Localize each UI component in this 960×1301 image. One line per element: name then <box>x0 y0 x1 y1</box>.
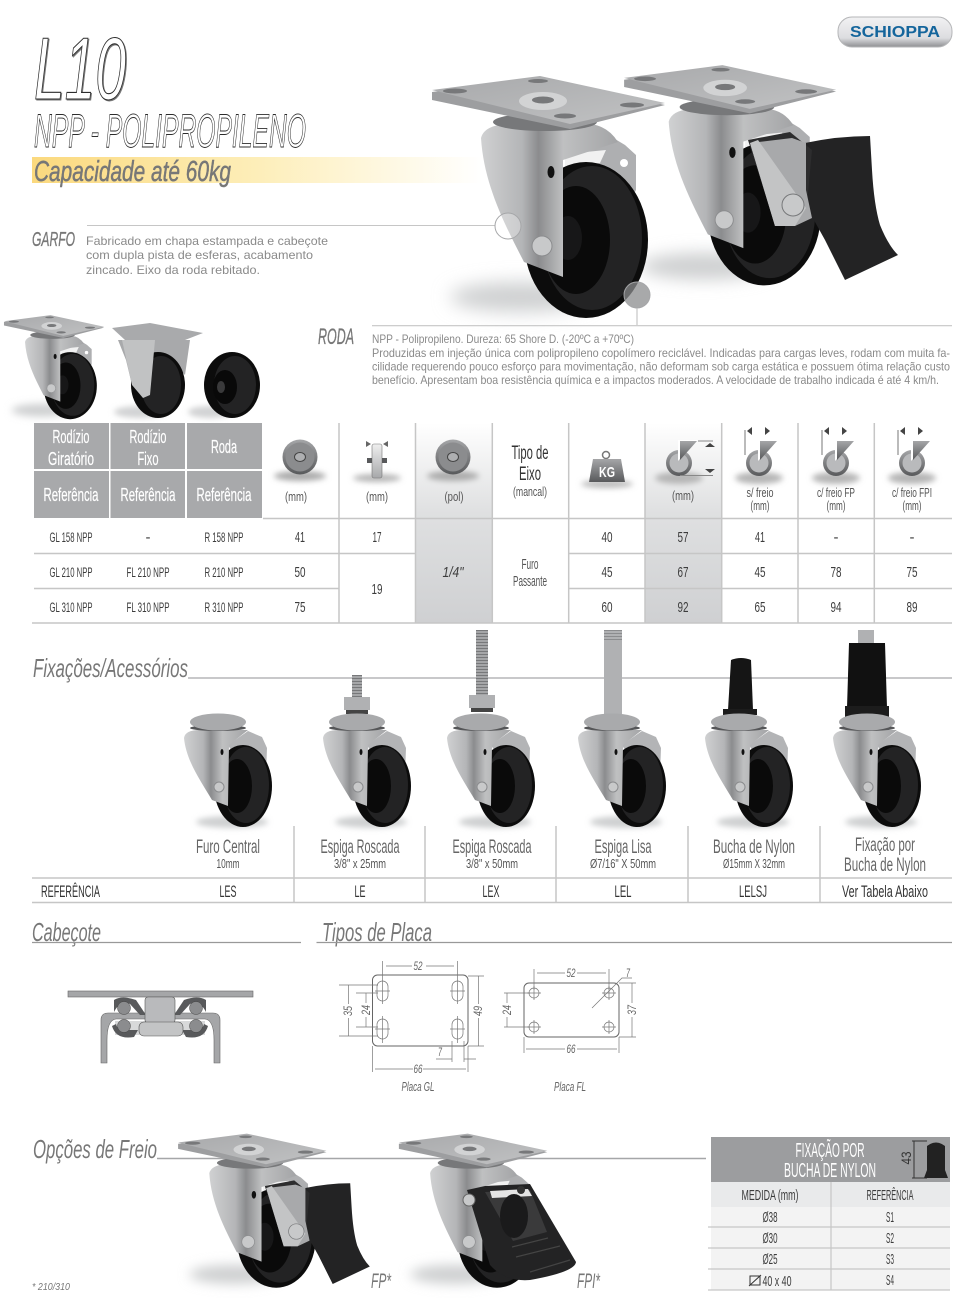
wheel section line <box>372 325 952 327</box>
FPI label: FPI* <box>577 1270 600 1293</box>
accessory: nylon bushing fixing caster <box>833 630 921 828</box>
nylon bushing table: BUCHA DE NYLON <box>784 1160 876 1182</box>
plate FL label: Placa FL <box>554 1079 586 1094</box>
logo: Schioppa <box>838 17 952 47</box>
accessories table: Espiga Roscada <box>320 837 400 858</box>
specification table: 17 <box>372 529 382 546</box>
nylon bushing table: Ø30 <box>762 1230 778 1247</box>
specification table: 41 <box>755 529 765 546</box>
specification table: FL 210 NPP <box>126 565 170 580</box>
specification table: Referência <box>196 485 252 505</box>
plate GL drawing <box>339 959 485 1076</box>
accessories table: Furo Central <box>196 837 260 858</box>
accessory: smooth stem caster <box>578 630 666 828</box>
detail callouts <box>495 213 650 325</box>
accessories table: LEX <box>482 882 500 901</box>
specification table: 89 <box>906 599 918 616</box>
fork description: Fabricado em chapa estampada e cabeçote <box>86 234 328 248</box>
specification table: R 210 NPP <box>204 565 244 580</box>
plate GL label: Placa GL <box>402 1079 434 1094</box>
accessories table: 3/8" x 50mm <box>466 856 518 871</box>
specification table: - <box>910 529 914 546</box>
product photo: FPI brake <box>399 1134 576 1288</box>
specification table: 75 <box>906 564 918 581</box>
specification table: Referência <box>120 485 176 505</box>
specification table: 75 <box>294 599 306 616</box>
specification table: FL 310 NPP <box>126 600 170 615</box>
accessories table: Ø15mm X 32mm <box>723 856 785 871</box>
specification table: - <box>834 529 838 546</box>
product photo: caster with brake <box>624 65 898 285</box>
brake options divider <box>157 1158 706 1160</box>
nylon bushing table: Ø38 <box>762 1209 778 1226</box>
accessories table: Fixação por <box>855 835 915 856</box>
specification table: (mancal) <box>513 484 547 499</box>
specification table: c/ freio FPI <box>892 485 932 500</box>
specification table: (mm) <box>285 489 307 504</box>
icon: total height <box>655 440 715 484</box>
specification table: GL 310 NPP <box>50 600 92 615</box>
specification table: 19 <box>372 581 382 598</box>
specification table: (mm) <box>672 488 694 503</box>
icon: offset without brake <box>735 427 783 484</box>
heading: Cabeçote: Cabeçote <box>32 917 101 947</box>
small product photo: swivel caster <box>4 315 104 419</box>
specification table: Fixo <box>138 449 158 469</box>
subtitle NPP - Polipropileno: NPP - POLIPROPILENO <box>34 104 306 157</box>
small product photo: fixed caster <box>112 323 203 418</box>
specification table: Referência <box>44 485 99 505</box>
icon: load weight: KG <box>599 464 615 481</box>
accessories divider <box>188 677 952 679</box>
plate FL drawing: 66 <box>566 1042 576 1056</box>
accessories table: LEL <box>614 882 632 901</box>
specification table: Furo <box>522 556 538 573</box>
specification table: 78 <box>830 564 842 581</box>
specification table: 1/4" <box>442 564 464 581</box>
nylon bushing table: 40 x 40 <box>762 1273 792 1290</box>
accessories table <box>32 826 952 902</box>
small product photo: wheel <box>188 352 260 418</box>
specification table: Rodízio <box>130 427 166 447</box>
specification table: 57 <box>678 529 688 546</box>
fork description: zincado. Eixo da roda rebitado. <box>86 263 260 277</box>
specification table: 50 <box>294 564 306 581</box>
plate GL drawing: 66 <box>414 1062 423 1076</box>
cabeçote cross-section diagram <box>68 991 253 1063</box>
nylon bushing table: S4 <box>886 1272 894 1289</box>
capacity text: Capacidade até 60kg <box>34 156 231 188</box>
fork divider line <box>87 224 495 226</box>
specification table: (mm) <box>366 489 388 504</box>
specification table: Tipo de <box>512 443 548 464</box>
accessory: central hole caster <box>184 714 272 828</box>
plate GL drawing: 24 <box>359 1005 373 1016</box>
nylon bushing table: FIXAÇÃO POR <box>796 1138 864 1162</box>
accessories heading: Fixações/Acessórios <box>33 653 188 683</box>
specification table: R 158 NPP <box>204 530 244 545</box>
fork description <box>86 234 328 277</box>
accessories table: LELSJ <box>739 882 767 901</box>
specification table: (mm) <box>750 498 770 513</box>
accessory: threaded stem 25mm caster <box>323 675 411 828</box>
fork description: com dupla pista de esferas, acabamento <box>86 248 313 262</box>
heading: Tipos de Placa: Tipos de Placa <box>322 917 432 947</box>
specification table: 60 <box>602 599 612 616</box>
accessories table: 10mm <box>216 856 240 871</box>
specification table: 41 <box>295 529 305 546</box>
capacity band <box>32 157 482 183</box>
nylon bushing table <box>708 1137 950 1290</box>
specification table: (pol) <box>444 489 464 504</box>
plate FL drawing: 52 <box>566 966 576 980</box>
specification table: 94 <box>830 599 842 616</box>
specification table: Eixo <box>519 464 541 485</box>
plate FL drawing: 24 <box>500 1005 514 1016</box>
nylon bushing table: MEDIDA (mm) <box>742 1187 798 1204</box>
title L10: L10 <box>34 19 126 118</box>
brake options heading: Opções de Freio <box>33 1134 157 1164</box>
nylon bushing table: S3 <box>886 1251 894 1268</box>
accessories table: LES <box>220 882 236 901</box>
icon: wheel width <box>353 441 401 482</box>
product photo: swivel caster <box>432 76 665 318</box>
specification table: 40 <box>602 529 612 546</box>
footnote: * 210/310 <box>32 1282 70 1293</box>
logo: Schioppa: SCHIOPPA <box>850 24 940 41</box>
wheel heading: RODA <box>318 324 354 349</box>
fork heading: GARFO <box>32 229 75 251</box>
plate GL drawing: 52 <box>414 959 423 973</box>
specification table: 67 <box>678 564 688 581</box>
nylon bushing table: 43 <box>898 1151 914 1164</box>
plate GL drawing: 49 <box>471 1006 485 1016</box>
specification table: R 310 NPP <box>204 600 244 615</box>
product photo: FP brake <box>178 1134 370 1288</box>
icon: wheel diameter <box>274 440 326 481</box>
icon: axle bore <box>427 440 479 481</box>
FP label: FP* <box>371 1270 391 1293</box>
accessories table: LE <box>354 882 366 901</box>
plate FL drawing: 37 <box>625 1004 639 1015</box>
specification table: Passante <box>513 573 547 590</box>
specification table: 45 <box>602 564 612 581</box>
specification table: Roda <box>211 437 238 457</box>
specification table: 92 <box>678 599 688 616</box>
specification table: (mm) <box>902 498 922 513</box>
specification table <box>32 423 952 623</box>
accessories table: Bucha de Nylon <box>713 837 795 858</box>
accessories table: Ø7/16" X 50mm <box>590 856 656 871</box>
specification table: GL 210 NPP <box>50 565 92 580</box>
specification table: GL 158 NPP <box>50 530 92 545</box>
nylon bushing table: S2 <box>886 1230 894 1247</box>
specification table: 65 <box>754 599 766 616</box>
plate FL drawing <box>500 966 639 1056</box>
specification table: Rodízio <box>52 427 90 447</box>
specification table: (mm) <box>826 498 846 513</box>
accessories table: Espiga Roscada <box>452 837 532 858</box>
accessory: threaded stem 50mm caster <box>447 630 535 828</box>
plate GL drawing: 35 <box>341 1006 355 1016</box>
nylon bushing table: Ø25 <box>762 1251 778 1268</box>
accessory: nylon bushing caster <box>705 658 793 828</box>
specification table: Giratório <box>48 449 94 469</box>
icon: offset with FP brake <box>812 427 860 484</box>
plate GL drawing: 7 <box>438 1045 443 1059</box>
accessories table: 3/8" x 25mm <box>334 856 386 871</box>
specification table: 45 <box>754 564 766 581</box>
plate FL drawing: 7 <box>626 966 631 980</box>
wheel description <box>372 332 950 387</box>
nylon bushing table: S1 <box>886 1209 894 1226</box>
specification table: c/ freio FP <box>817 485 855 500</box>
accessories table: REFERÊNCIA <box>41 882 100 901</box>
icon: load weight <box>581 452 633 488</box>
icon: offset with FPI brake <box>888 427 936 484</box>
accessories table: Espiga Lisa <box>594 837 652 858</box>
specification table: s/ freio <box>746 485 774 500</box>
wheel description: NPP - Polipropileno. Dureza: 65 Shore D. (-20ºC a +70ºC) <box>372 332 634 346</box>
specification table: - <box>146 529 150 546</box>
